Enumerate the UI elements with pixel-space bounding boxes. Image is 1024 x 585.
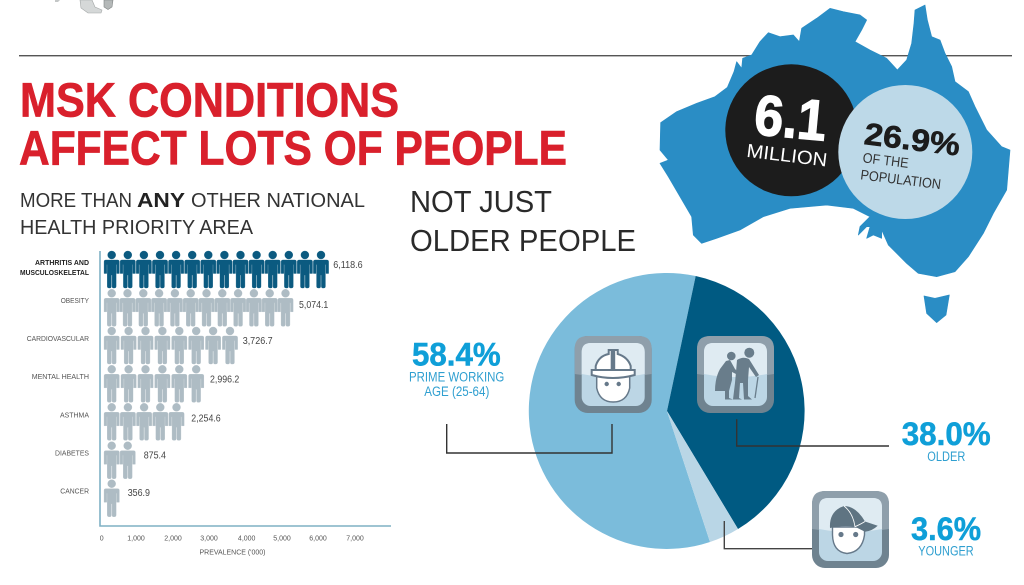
leader line: older: [737, 419, 889, 446]
row: arthritis and musculoskeletal: MUSCULOSKELETAL: [20, 268, 89, 277]
subheading: more than any other national health priority area: ANY: [137, 189, 185, 212]
label: 38.0% older: OLDER: [927, 449, 966, 464]
row: diabetes: [55, 442, 166, 479]
callout: 26.9% of the population: POPULATION: [860, 166, 942, 192]
row: cancer: [60, 480, 150, 517]
icon: child in baseball cap: [812, 491, 889, 568]
row: obesity: OBESITY: [61, 296, 89, 305]
axis tick labels: 2,000: [164, 536, 182, 542]
subheading: more than any other national health priority area: HEALTH PRIORITY AREA: [20, 216, 253, 239]
callout: 6.1 million: MILLION: [745, 141, 828, 172]
row: cardiovascular: [27, 327, 273, 364]
row: diabetes: DIABETES: [55, 448, 89, 458]
pie chart: age groups: [529, 273, 805, 549]
row: cancer: CANCER: [60, 486, 89, 496]
row: diabetes: 875.4: [144, 451, 166, 462]
callout: 26.9% of the population: OF THE: [862, 149, 910, 171]
axis tick labels: 4,000: [238, 536, 256, 542]
heading: not just older people: NOT JUST: [410, 184, 552, 219]
axis tick labels: 5,000: [273, 536, 291, 542]
title: AFFECT LOTS OF PEOPLE: [19, 122, 567, 176]
map of Australia with statistics: [660, 5, 1010, 323]
axis tick labels: 6,000: [309, 536, 327, 542]
callout: 6.1 million: 6.1: [752, 83, 829, 154]
axis title: PREVALENCE ('000): [200, 550, 266, 556]
axis tick labels: [100, 536, 364, 542]
axis tick labels: 1,000: [127, 536, 145, 542]
pictogram chart: prevalence by health priority area: [20, 251, 391, 556]
cropped illustration: feet at top edge: [55, 0, 113, 13]
label: 58.4% prime working age: [409, 337, 504, 399]
subheading: more than any other national health priority area: MORE THAN: [20, 189, 132, 212]
subheading: more than any other national health priority area: [20, 189, 365, 239]
label: 58.4% prime working age: PRIME WORKING: [409, 370, 504, 385]
row: arthritis and musculoskeletal: ARTHRITIS AND: [35, 258, 89, 267]
icon: worker in hard hat: [575, 336, 652, 413]
icon: elderly couple: [697, 336, 774, 413]
label: 58.4% prime working age: 58.4%: [412, 337, 501, 373]
callout: 26.9% of the population: [838, 85, 972, 219]
leader line: prime working age: [447, 424, 612, 453]
label: 3.6% younger: YOUNGER: [918, 544, 974, 559]
label: 58.4% prime working age: AGE (25-64): [424, 384, 489, 399]
row: arthritis and musculoskeletal: [20, 251, 363, 288]
row: obesity: 5,074.1: [299, 300, 328, 311]
axis tick labels: 0: [100, 536, 104, 542]
label: 3.6% younger: 3.6%: [911, 511, 981, 547]
row: asthma: ASTHMA: [60, 410, 90, 420]
row: mental health: [32, 365, 239, 402]
row: cancer: 356.9: [128, 488, 150, 499]
divider rule: [19, 55, 1012, 56]
row: mental health: MENTAL HEALTH: [32, 372, 89, 381]
row: asthma: [60, 403, 221, 440]
callout: 26.9% of the population: 26.9%: [862, 116, 962, 163]
title: [19, 75, 567, 176]
leader line: younger: [724, 521, 813, 549]
row: arthritis and musculoskeletal: 6,118.6: [333, 260, 363, 271]
heading: not just older people: OLDER PEOPLE: [410, 223, 636, 258]
label: 38.0% older: 38.0%: [902, 416, 991, 452]
heading: not just older people: [410, 184, 636, 258]
axis tick labels: 3,000: [200, 536, 218, 542]
chart axes: [100, 251, 391, 526]
row: cardiovascular: CARDIOVASCULAR: [27, 334, 89, 343]
axis tick labels: 7,000: [346, 536, 364, 542]
title: MSK CONDITIONS: [20, 75, 399, 128]
row: obesity: [61, 289, 328, 326]
map: mainland and Tasmania: [660, 5, 1010, 323]
row: mental health: 2,996.2: [210, 374, 239, 385]
callout: 6.1 million: [725, 64, 857, 196]
row: asthma: 2,254.6: [191, 414, 221, 425]
subheading: more than any other national health priority area: OTHER NATIONAL: [191, 189, 365, 212]
row: cardiovascular: 3,726.7: [243, 336, 273, 347]
